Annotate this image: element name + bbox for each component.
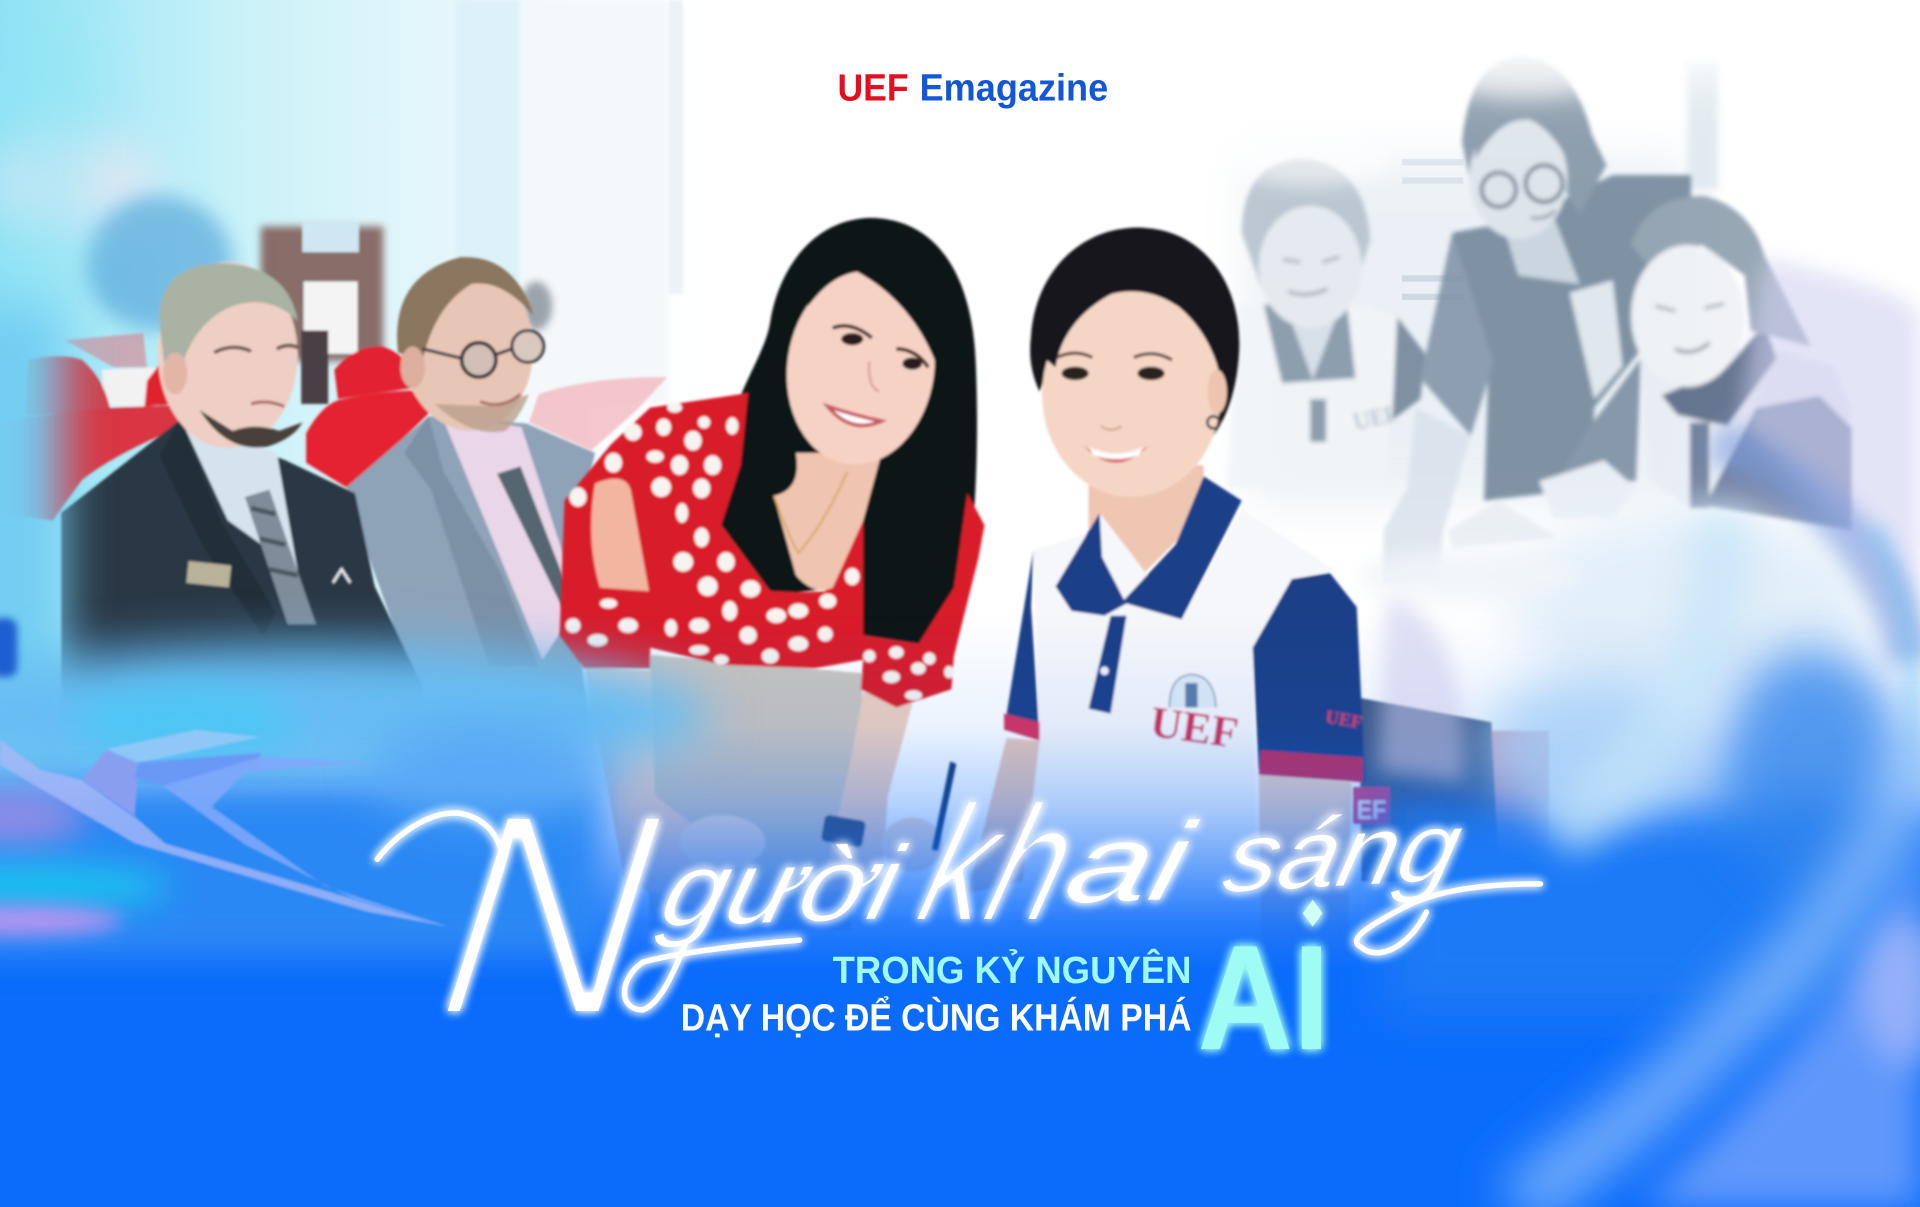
polka dots [566,403,954,700]
hands on table [680,815,943,872]
title: Người khai sáng: sáng [1215,792,1472,914]
hair back [719,218,977,645]
face [1042,291,1221,497]
placket [1089,616,1127,714]
blouse sleeve cut-out [591,479,649,591]
neck [1089,465,1204,612]
right sleeve [1253,573,1365,782]
shirt logo: UEF [1147,697,1241,758]
face [774,260,947,474]
man with glasses [347,253,595,722]
student left: UEF [1351,401,1400,436]
group backdrop [1249,61,1718,502]
arms [1259,775,1352,979]
subtitle line 2: DẠY HỌC ĐỂ CÙNG KHÁM PHÁ [681,995,1191,1040]
right swooshes [1378,257,1920,1207]
sleeve logo: UEF [1324,706,1364,733]
photo: grey group of teacher and students [1227,56,1851,583]
backpack and chair: EF [1357,795,1386,825]
title: Người khai sáng: gười [651,824,915,949]
swash strokes [377,813,1540,1010]
title: Người khai sáng [377,750,1540,1079]
ear and earring [1207,370,1227,428]
title: Người khai sáng: N [423,750,678,1079]
hair fringe [808,248,938,362]
left blue haze [0,0,710,955]
photo: woman in red polka-dot blouse [560,218,984,930]
shirt body [998,509,1336,979]
red seats [0,346,667,520]
photo: seated guests in suits [0,196,667,722]
teacher [1384,56,1691,583]
pen [932,761,956,851]
backpack and chair [1353,698,1549,881]
student left [1227,159,1425,488]
logo: UEF Emagazine [838,67,1108,109]
photo: girl in UEF polo [932,228,1549,979]
chest and necklace [774,453,882,590]
student right [1539,196,1851,530]
blouse [560,393,984,708]
title: Người khai sáng: ai [1054,798,1207,927]
right cuff [1259,750,1363,782]
logo: UEF Emagazine: Emagazine [920,67,1108,109]
white haze over group [1139,0,1920,686]
man in dark suit [61,262,422,722]
collar [1056,476,1242,619]
table papers [1447,501,1558,550]
AI wordmark: AI [1198,914,1330,1081]
left cuff [1004,714,1040,741]
skirt and arms [585,655,912,930]
left swoosh [0,730,448,935]
room backdrop [65,196,552,406]
subtitle line 1: TRONG KỶ NGUYÊN [833,948,1191,992]
logo: UEF Emagazine: UEF [838,67,909,109]
facial features [1057,353,1172,463]
hair [1030,228,1239,452]
facial features [828,326,928,425]
bottom blue fade overlay [0,612,1920,1207]
watch [821,814,866,848]
left sleeve [1004,550,1040,738]
title: Người khai sáng: kh [902,771,1096,956]
